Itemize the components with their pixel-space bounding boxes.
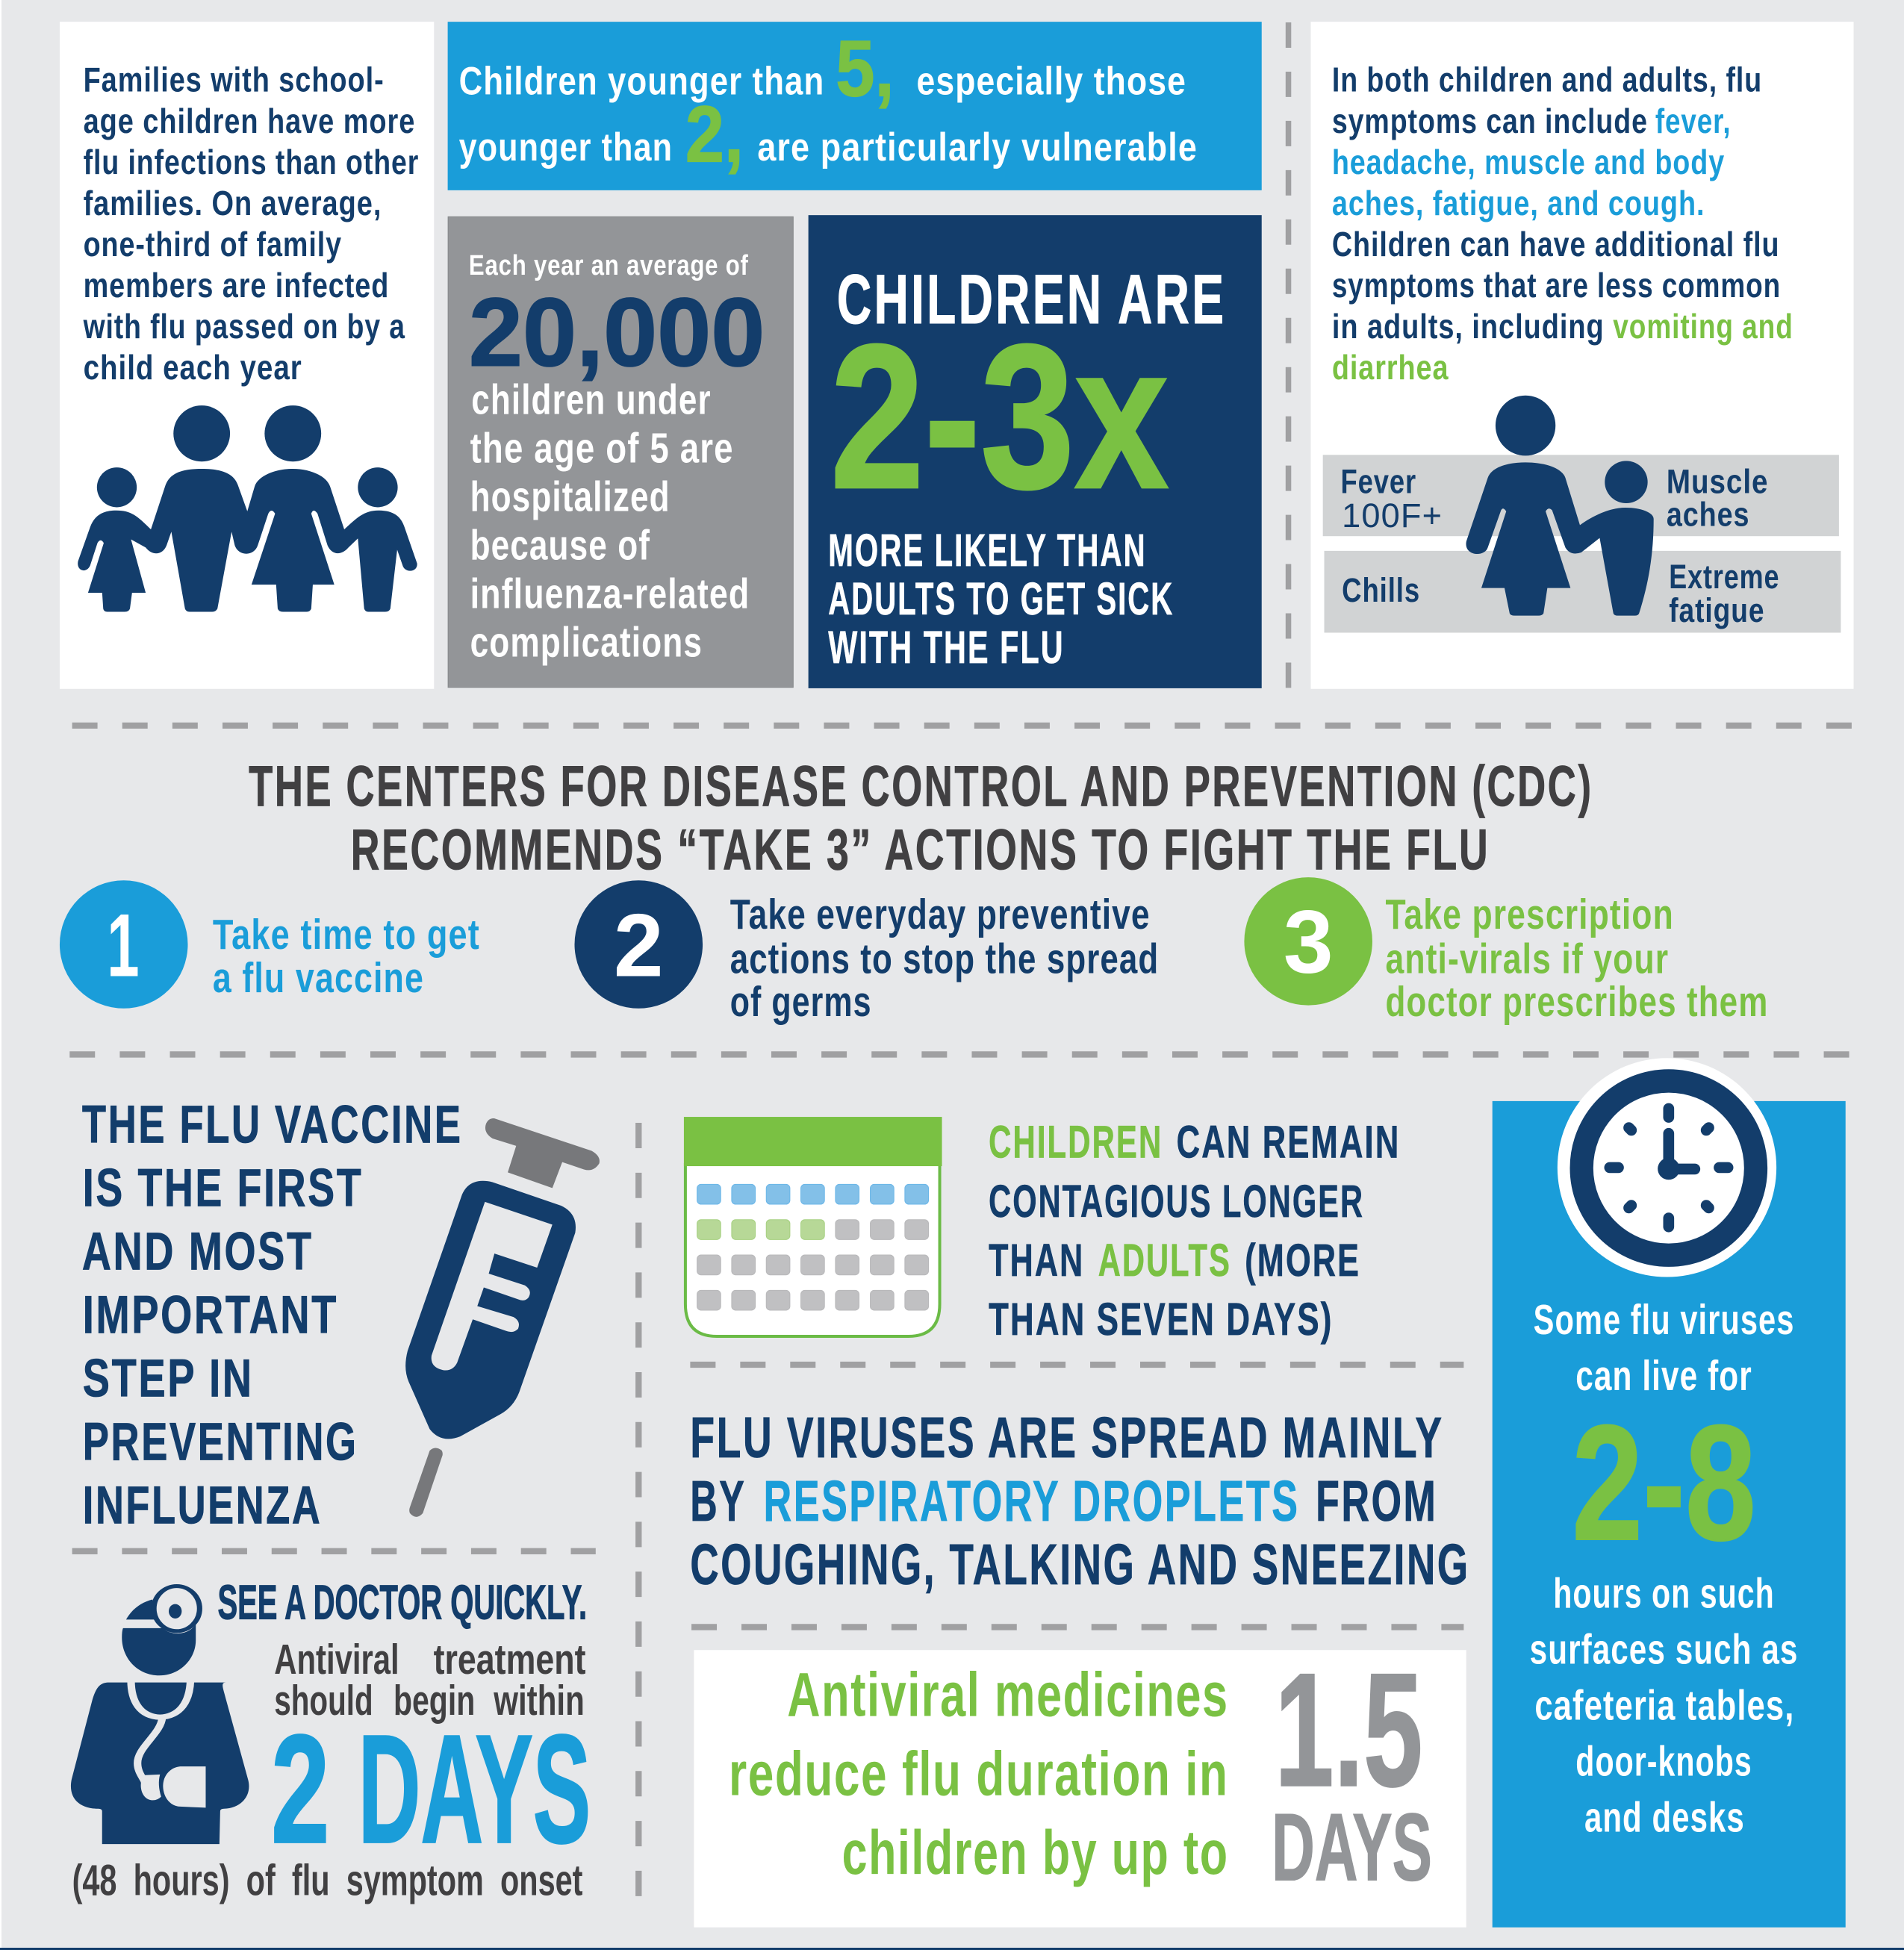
text: symptoms description: in adults, including [1332, 307, 1605, 346]
panel: 20,000 hospitalized: the age of 5 are [470, 425, 734, 472]
step 2: preventive actions [574, 880, 1159, 1025]
icon: doctor [71, 1586, 249, 1844]
symptom labels: aches [1667, 496, 1749, 534]
text: family infections: families. On average, [84, 184, 382, 222]
step 3: anti-virals: doctor prescribes them [1385, 978, 1768, 1025]
symptom labels: fatigue [1669, 591, 1764, 629]
text: children contagious longer: CONTAGIOUS LONGER [989, 1176, 1364, 1227]
heading: respiratory droplets: FROM [1316, 1470, 1437, 1533]
panel: 2-3x more likely: CHILDREN ARE [837, 261, 1226, 338]
text: symptoms description: headache, muscle and body [1332, 143, 1725, 181]
text: family infections: with flu passed on by a [83, 307, 405, 346]
step 2: preventive actions: 2 [614, 895, 664, 995]
text: children contagious longer [989, 1117, 1400, 1345]
text: symptoms description: symptoms can include [1332, 102, 1648, 140]
panel: antiviral medicines: Antiviral medicines [787, 1660, 1229, 1730]
panel: 2-3x more likely [809, 215, 1262, 688]
symptom labels: Extreme [1669, 558, 1779, 596]
panel: 20,000 hospitalized: 20,000 [469, 278, 765, 387]
banner: children younger than 5: 5, [836, 24, 895, 113]
panel: flu symptoms [1311, 22, 1854, 689]
step 3: anti-virals [1244, 877, 1768, 1025]
panel: 2-3x more likely: WITH THE FLU [828, 622, 1065, 673]
step 2: preventive actions: actions to stop the spread [730, 935, 1159, 982]
icon: syringe [405, 1118, 600, 1517]
text: children contagious longer: CAN REMAIN [1177, 1117, 1400, 1168]
text: see a doctor quickly: begin [393, 1677, 475, 1724]
step 1: vaccine: 1 [107, 895, 140, 995]
text: see a doctor quickly [72, 1575, 591, 1904]
heading: flu vaccine first step: AND MOST [82, 1222, 314, 1282]
panel: virus survival on surfaces: can live for [1575, 1352, 1752, 1399]
panel: antiviral medicines: reduce flu duration in [729, 1739, 1229, 1808]
heading: flu vaccine first step: IMPORTANT [83, 1286, 338, 1345]
heading: respiratory droplets: BY [690, 1470, 746, 1533]
text: see a doctor quickly: within [493, 1677, 585, 1724]
text: family infections: members are infected [84, 266, 389, 305]
text: see a doctor quickly: should [274, 1677, 373, 1724]
panel: virus survival on surfaces: 2-8 [1572, 1391, 1756, 1574]
step 3: anti-virals: anti-virals if your [1385, 935, 1669, 982]
panel: virus survival on surfaces: cafeteria tables, [1534, 1682, 1794, 1729]
step 3: anti-virals: Take prescription [1385, 891, 1674, 938]
panel: virus survival on surfaces: hours on such [1553, 1570, 1775, 1617]
text: see a doctor quickly: DAYS [358, 1703, 591, 1875]
banner: children younger than 5: are particularly vulnerable [757, 125, 1198, 169]
text: symptoms description: In both children and adults, flu [1332, 60, 1762, 99]
text: family infections: flu infections than other [84, 143, 419, 181]
panel: 20,000 hospitalized: Each year an average of [469, 249, 749, 281]
text: family infections [83, 60, 419, 387]
text: children contagious longer: THAN SEVEN DAYS) [989, 1294, 1333, 1345]
text: family infections: one-third of family [84, 225, 342, 264]
heading: CDC take 3 actions [249, 755, 1593, 882]
panel: antiviral medicines: children by up to [842, 1818, 1229, 1887]
panel: 20,000 hospitalized [448, 217, 793, 688]
panel: 20,000 hospitalized: because of [470, 522, 650, 569]
icon: adult and child [1466, 396, 1654, 616]
text: children contagious longer: CHILDREN [989, 1117, 1163, 1168]
step 1: vaccine: Take time to get [213, 911, 480, 958]
symptom labels: Chills [1342, 571, 1420, 609]
panel: virus survival on surfaces [1493, 1058, 1846, 1928]
text: see a doctor quickly: 2 [271, 1703, 329, 1875]
text: see a doctor quickly: Antiviral [274, 1636, 399, 1683]
heading: flu vaccine first step: IS THE FIRST [83, 1159, 363, 1218]
heading: respiratory droplets: COUGHING, TALKING AND SNEEZING [690, 1533, 1470, 1597]
text: see a doctor quickly: treatment [434, 1636, 586, 1683]
text: symptoms description: aches, fatigue, and cough. [1332, 184, 1705, 222]
heading: flu vaccine first step [82, 1095, 463, 1535]
text: children contagious longer: ADULTS [1098, 1235, 1231, 1286]
banner: children younger than 5: Children younger than [459, 60, 824, 104]
symptom labels: Fever [1340, 462, 1416, 500]
text: see a doctor quickly: SEE A DOCTOR QUICKLY. [217, 1575, 587, 1630]
icon: calendar [684, 1117, 942, 1336]
step 1: vaccine [60, 880, 480, 1009]
panel: antiviral medicines: 1.5 [1275, 1639, 1422, 1820]
panel: 20,000 hospitalized: children under [471, 376, 712, 423]
heading: respiratory droplets [690, 1407, 1470, 1597]
heading: respiratory droplets: FLU VIRUSES ARE SPREAD MAINLY [690, 1407, 1444, 1470]
panel: virus survival on surfaces: door-knobs [1575, 1737, 1752, 1784]
symptom bands [1323, 455, 1841, 632]
panel: antiviral medicines [694, 1639, 1466, 1928]
icon: clock [1558, 1058, 1776, 1277]
panel: 2-3x more likely: MORE LIKELY THAN [828, 525, 1147, 576]
symptom labels: Muscle [1667, 462, 1768, 500]
text: family infections: child each year [84, 348, 302, 387]
banner: children younger than 5: 2, [685, 90, 744, 179]
text: symptoms description: fever, [1655, 102, 1731, 140]
text: children contagious longer: (MORE [1245, 1235, 1360, 1286]
banner: children younger than 5: especially those [917, 60, 1186, 104]
heading: respiratory droplets: RESPIRATORY DROPLETS [764, 1470, 1300, 1533]
text: symptoms description: Children can have additional flu [1332, 225, 1779, 264]
text: symptoms description [1332, 60, 1793, 387]
panel: 2-3x more likely: 2-3x [830, 302, 1169, 532]
icon: family [78, 405, 417, 611]
text: symptoms description: diarrhea [1332, 348, 1449, 387]
text: family infections: Families with school- [84, 60, 385, 99]
banner: children younger than 5: younger than [459, 125, 673, 169]
panel: families [60, 22, 434, 689]
heading: flu vaccine first step: STEP IN [83, 1348, 254, 1408]
banner: children younger than 5 [448, 22, 1262, 190]
panel: virus survival on surfaces: Some flu viruses [1534, 1296, 1794, 1343]
panel: virus survival on surfaces: and desks [1584, 1793, 1745, 1840]
text: family infections: age children have more [84, 102, 415, 140]
symptom labels: 100F+ [1342, 496, 1443, 535]
panel: 20,000 hospitalized: hospitalized [470, 473, 671, 520]
panel: antiviral medicines: DAYS [1272, 1794, 1432, 1901]
heading: flu vaccine first step: THE FLU VACCINE [82, 1095, 463, 1155]
step 3: anti-virals: 3 [1284, 892, 1334, 992]
step 2: preventive actions: Take everyday preventive [730, 891, 1151, 938]
heading: flu vaccine first step: PREVENTING [83, 1412, 358, 1471]
text: see a doctor quickly: (48 hours) of flu symptom onset [72, 1856, 582, 1904]
panel: 20,000 hospitalized: complications [470, 618, 703, 665]
text: symptoms description: vomiting and [1613, 307, 1793, 346]
text: symptoms description: symptoms that are less common [1332, 266, 1781, 305]
heading: flu vaccine first step: INFLUENZA [83, 1475, 322, 1535]
panel: 20,000 hospitalized: influenza-related [470, 570, 750, 617]
text: children contagious longer: THAN [989, 1235, 1084, 1286]
step 1: vaccine: a flu vaccine [213, 954, 424, 1001]
symptom labels [1340, 462, 1779, 629]
step 2: preventive actions: of germs [730, 978, 872, 1025]
panel: virus survival on surfaces: surfaces such as [1530, 1626, 1798, 1673]
panel: 2-3x more likely: ADULTS TO GET SICK [828, 573, 1174, 625]
